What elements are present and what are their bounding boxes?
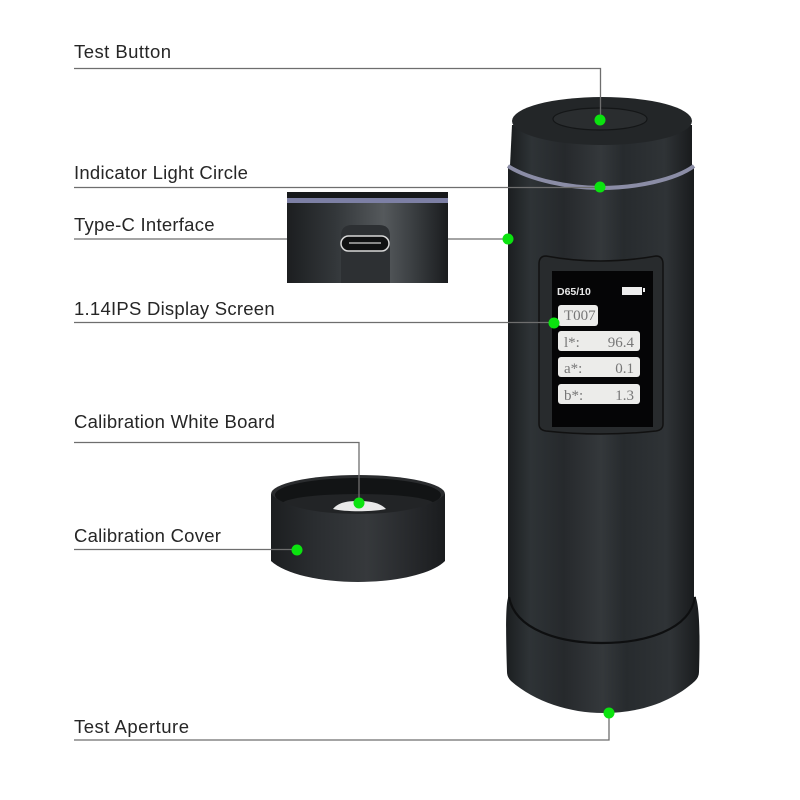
sample name <box>558 305 598 326</box>
label: Calibration White Board: Calibration White Board <box>74 411 275 432</box>
label: Calibration Cover: Calibration Cover <box>74 525 221 546</box>
a value <box>558 357 640 377</box>
battery icon <box>622 287 645 295</box>
display screen: a*: <box>564 361 582 377</box>
top cap face <box>512 97 692 145</box>
label: Test Button: Test Button <box>74 41 172 62</box>
top cap <box>510 125 692 186</box>
label: Indicator Light Circle <box>74 162 606 192</box>
indicator light ring <box>508 166 694 188</box>
label: 1.14IPS Display Screen: 1.14IPS Display Screen <box>74 298 275 319</box>
b value <box>558 384 640 404</box>
display screen: T007 <box>564 308 596 324</box>
front lip <box>271 494 445 517</box>
display bezel <box>539 256 663 434</box>
base ring <box>506 596 700 713</box>
label: Type-C Interface <box>74 214 514 244</box>
cover outer wall <box>271 494 445 582</box>
label: Indicator Light Circle: Indicator Light Circle <box>74 162 248 183</box>
label: Test Aperture: Test Aperture <box>74 716 190 737</box>
L value <box>558 331 640 351</box>
display screen: 96.4 <box>608 335 634 351</box>
display screen: b*: <box>564 388 583 404</box>
label: Calibration Cover <box>74 525 302 556</box>
label: Test Button <box>74 41 606 126</box>
device body <box>506 97 700 713</box>
display screen: 0.1 <box>615 361 634 377</box>
calibration cover <box>271 475 445 582</box>
test button <box>553 108 647 130</box>
display screen: 1.3 <box>615 388 634 404</box>
Type-C inset photo <box>287 192 448 283</box>
label: 1.14IPS Display Screen <box>74 298 560 328</box>
screen header: D65/10 <box>557 286 591 298</box>
white board <box>333 501 386 511</box>
label: Type-C Interface: Type-C Interface <box>74 214 215 235</box>
main barrel <box>508 166 694 660</box>
label: Calibration White Board <box>74 411 364 508</box>
display screen <box>552 271 653 427</box>
display screen: l*: <box>564 335 580 351</box>
label: Test Aperture <box>74 708 614 740</box>
cover rim <box>271 475 445 513</box>
USB-C port <box>341 236 389 251</box>
